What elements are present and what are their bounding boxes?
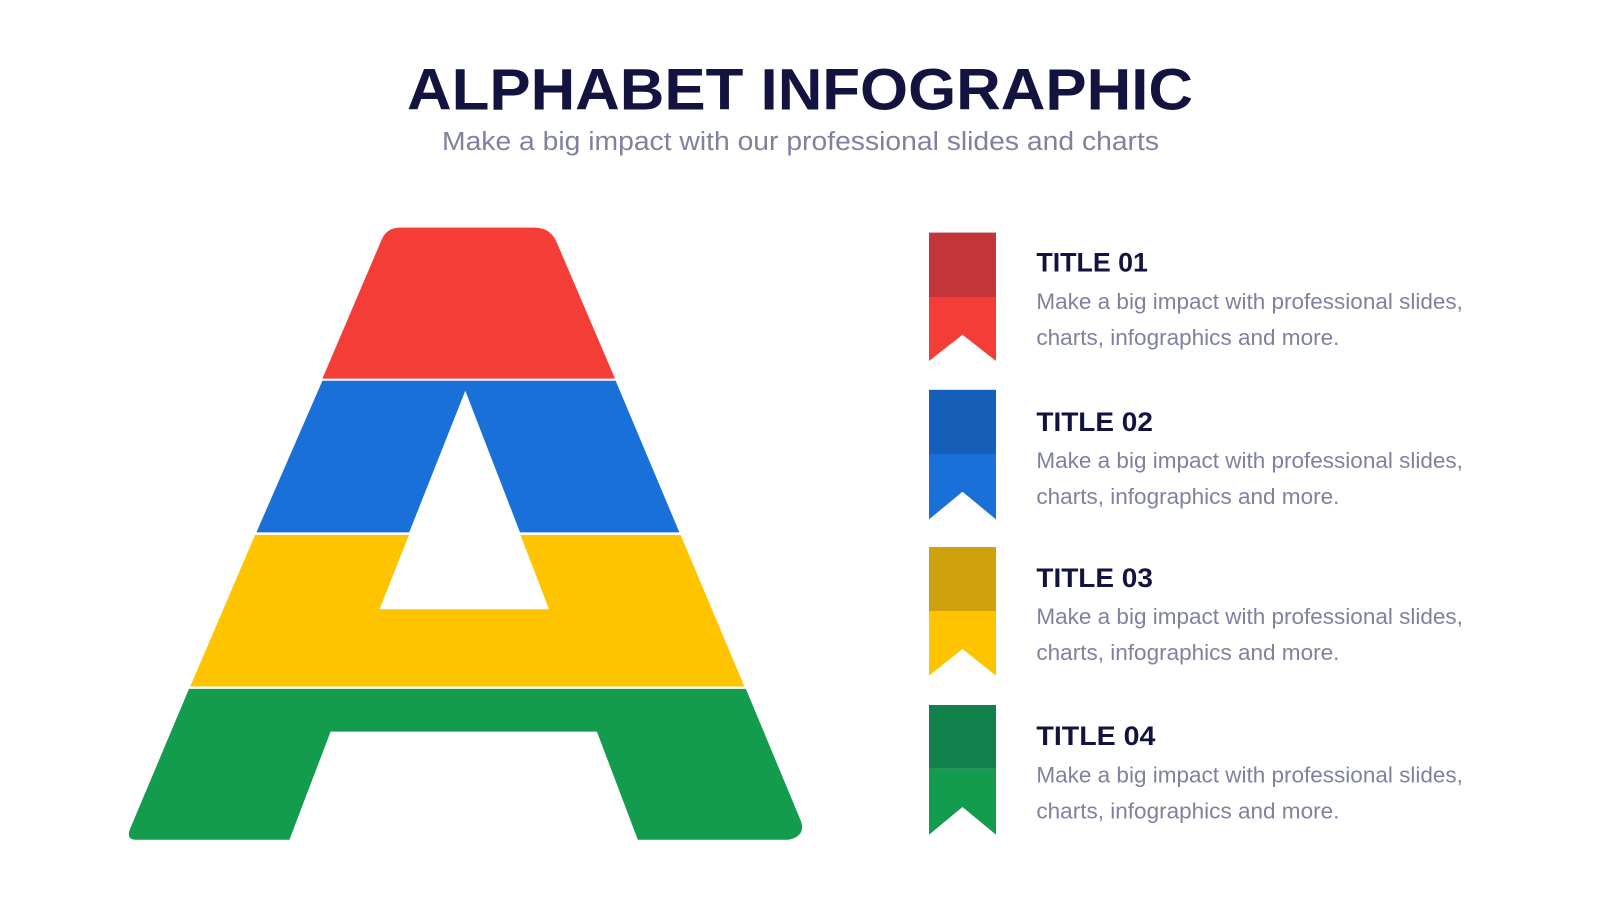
title: ALPHABET INFOGRAPHIC bbox=[407, 58, 1193, 122]
subtitle: Make a big impact with our professional slides and charts bbox=[442, 128, 1159, 156]
legend item 1 bbox=[929, 233, 1463, 361]
heading 4: TITLE 04 bbox=[1036, 721, 1155, 751]
description 3: Make a big impact with professional slides, bbox=[1036, 604, 1463, 629]
description 1: Make a big impact with professional slides, bbox=[1036, 289, 1463, 314]
legend item 2 bbox=[929, 390, 1463, 519]
description 4: charts, infographics and more. bbox=[1036, 799, 1339, 824]
ribbon icon 3 bbox=[929, 547, 996, 676]
letter A chart bbox=[129, 228, 802, 840]
heading 3: TITLE 03 bbox=[1036, 563, 1153, 593]
ribbon icon 4 bbox=[929, 705, 996, 835]
heading 2: TITLE 02 bbox=[1036, 407, 1153, 437]
A segment 3: yellow bbox=[190, 535, 744, 686]
legend item 4 bbox=[929, 705, 1463, 835]
A segment 4: green bbox=[129, 689, 802, 840]
heading 1: TITLE 01 bbox=[1036, 248, 1148, 278]
A segment 1: red bbox=[322, 228, 615, 379]
A segment 2: blue bbox=[256, 381, 679, 532]
description 3: charts, infographics and more. bbox=[1036, 640, 1339, 665]
description 1: charts, infographics and more. bbox=[1036, 325, 1339, 350]
description 4: Make a big impact with professional slides, bbox=[1036, 763, 1463, 788]
ribbon icon 2 bbox=[929, 390, 996, 519]
description 2: charts, infographics and more. bbox=[1036, 484, 1339, 509]
ribbon icon 1 bbox=[929, 233, 996, 361]
description 2: Make a big impact with professional slides, bbox=[1036, 448, 1463, 473]
legend item 3 bbox=[929, 547, 1463, 676]
